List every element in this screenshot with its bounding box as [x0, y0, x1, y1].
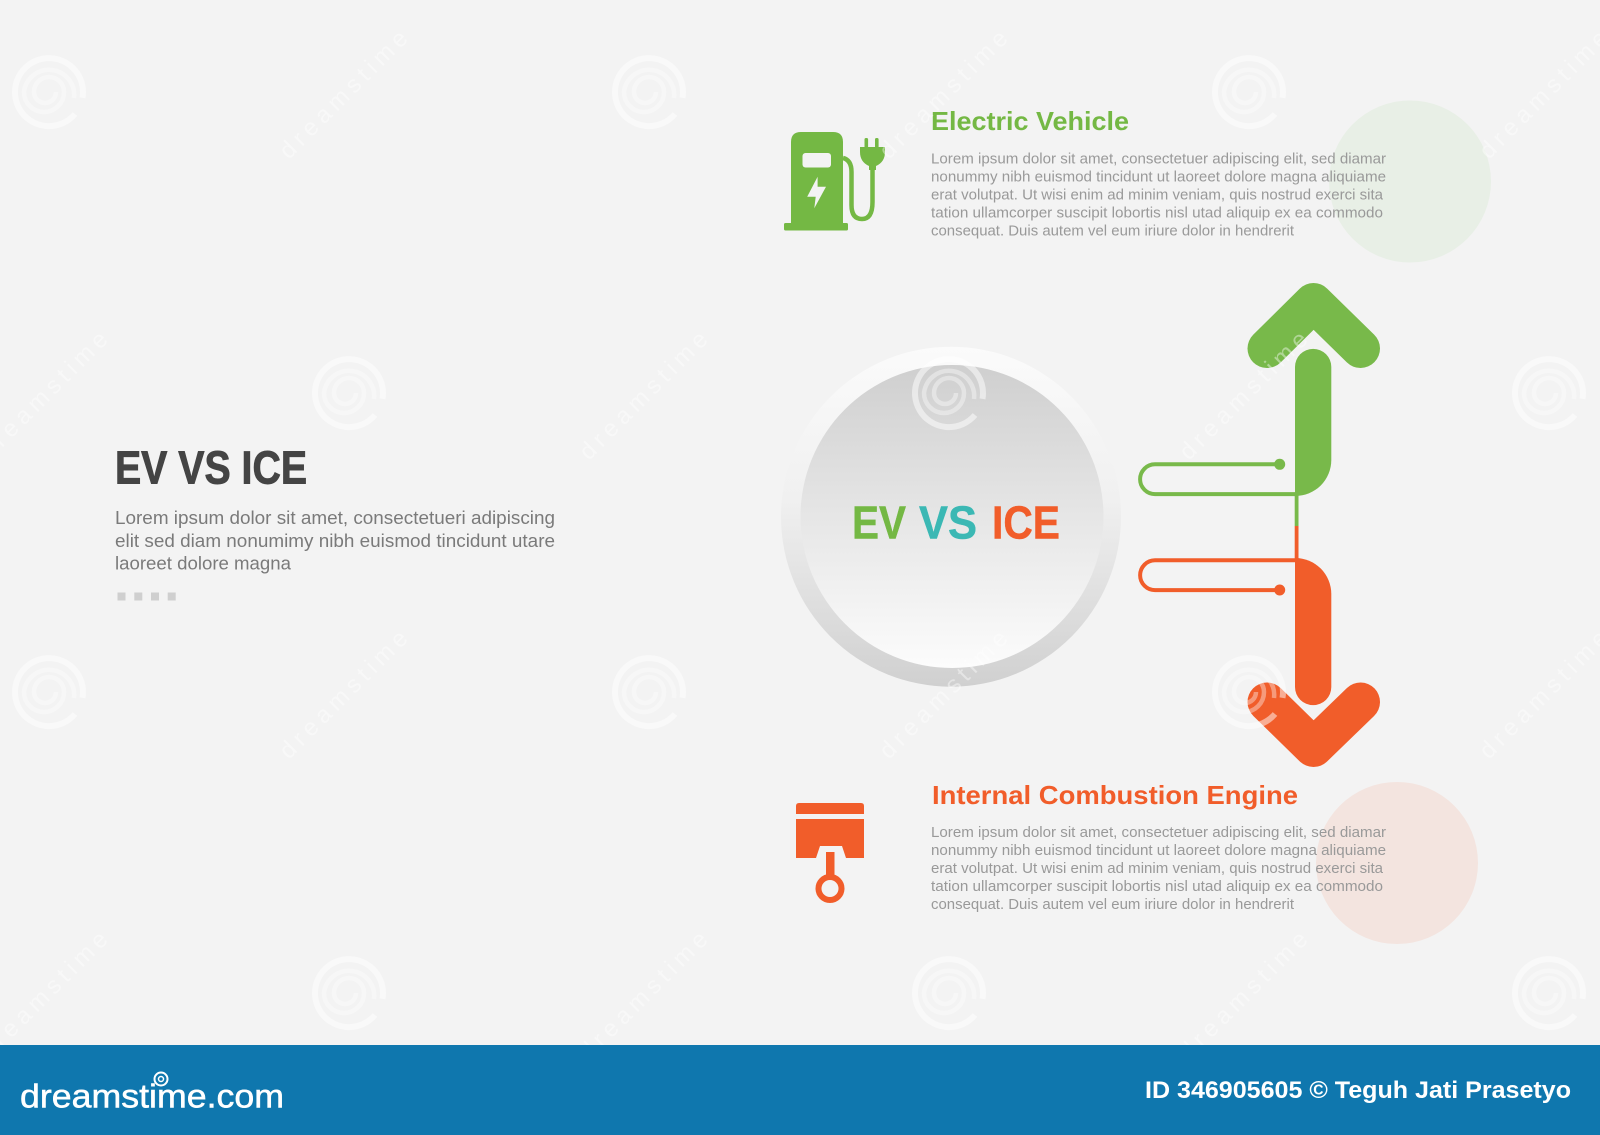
badge label: VS — [919, 496, 977, 548]
description: internal combustion engine — [931, 824, 1386, 913]
watermark text: dreamstime — [574, 926, 713, 1065]
arrow: up, green — [1140, 302, 1360, 526]
pagination squares — [118, 592, 176, 600]
description: internal combustion engine: erat volutpat. Ut wisi enim ad minim veniam, quis nostrud exerci sita — [931, 860, 1384, 877]
description: electric vehicle — [931, 150, 1386, 240]
arrow: down, red — [1140, 526, 1360, 748]
panel: internal combustion engine — [796, 780, 1478, 944]
central circle badge — [781, 347, 1121, 687]
watermark text: dreamstime — [274, 25, 413, 164]
left description — [115, 508, 555, 574]
left description: laoreet dolore magna — [115, 554, 292, 574]
watermark text: dreamstime — [874, 25, 1013, 164]
panel: electric vehicle — [784, 100, 1491, 262]
left heading: EV VS ICE: EV VS ICE — [115, 442, 307, 494]
description: internal combustion engine: nonummy nibh euismod tincidunt ut laoreet dolore magna aliquiame — [931, 842, 1386, 859]
icon: piston — [796, 803, 864, 900]
description: electric vehicle: Lorem ipsum dolor sit amet, consectetuer adipiscing elit, sed diamar — [931, 150, 1386, 168]
heading: electric vehicle: Electric Vehicle — [931, 106, 1129, 136]
watermark text: dreamstime — [874, 625, 1013, 764]
description: electric vehicle: erat volutpat. Ut wisi enim ad minim veniam, quis nostrud exerci sita — [931, 186, 1384, 204]
decorative green circle — [1329, 100, 1491, 262]
heading: internal combustion engine: Internal Combustion Engine — [932, 780, 1298, 810]
icon: charging station — [784, 132, 885, 230]
description: internal combustion engine: Lorem ipsum dolor sit amet, consectetuer adipiscing elit, sed diamar — [931, 824, 1386, 841]
badge label: EV — [852, 496, 906, 548]
watermark text: dreamstime — [1174, 926, 1313, 1065]
watermark text: dreamstime — [1174, 326, 1313, 465]
description: electric vehicle: nonummy nibh euismod tincidunt ut laoreet dolore magna aliquiame — [931, 168, 1386, 186]
left description: Lorem ipsum dolor sit amet, consectetueri adipiscing — [115, 508, 555, 528]
watermark text: dreamstime — [274, 625, 413, 764]
description: internal combustion engine: tation ullamcorper suscipit lobortis nisl utad aliquip ex ea commodo — [931, 878, 1383, 895]
badge label: ICE — [992, 496, 1060, 548]
description: electric vehicle: tation ullamcorper suscipit lobortis nisl utad aliquip ex ea commodo — [931, 204, 1383, 222]
watermark text: dreamstime — [574, 326, 713, 465]
description: electric vehicle: consequat. Duis autem vel eum iriure dolor in hendrerit — [931, 222, 1295, 240]
footer bar — [0, 1045, 1600, 1135]
decorative red circle — [1316, 782, 1478, 944]
footer credit: ID 346905605 © Teguh Jati Prasetyo — [1145, 1077, 1571, 1104]
description: internal combustion engine: consequat. Duis autem vel eum iriure dolor in hendrerit — [931, 896, 1295, 913]
footer logo: dreamstime.com — [20, 1078, 284, 1114]
left description: elit sed diam nonumimy nibh euismod tincidunt utare — [115, 531, 555, 551]
